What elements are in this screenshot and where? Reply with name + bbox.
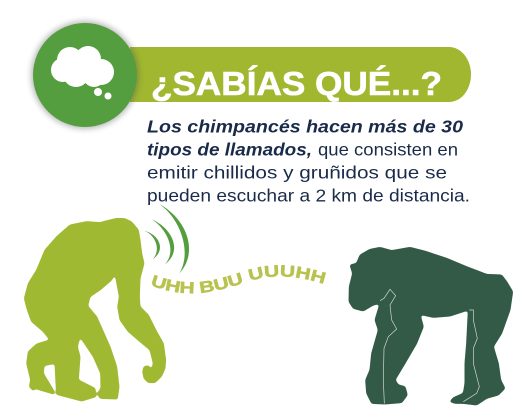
- icon: light green chimpanzee silhouette: [24, 218, 166, 401]
- text block: chimpanzee calls fact: emitir chillidos y gruñidos que se: [147, 162, 447, 182]
- text block: chimpanzee calls fact: tipos de llamados,: [147, 140, 312, 160]
- icon: sound waves: [144, 204, 189, 273]
- text block: chimpanzee calls fact: que consisten en: [318, 140, 458, 160]
- text block: chimpanzee calls fact: [147, 116, 470, 206]
- text block: chimpanzee calls fact: pueden escuchar a 2 km de distancia.: [147, 186, 470, 206]
- title banner: [130, 47, 471, 102]
- limb outlines: [380, 289, 479, 403]
- text block: chimpanzee calls fact: Los chimpancés hacen más de 30: [147, 116, 463, 136]
- title: ¿SABÍAS QUÉ...?: [151, 65, 442, 102]
- icon: cloud: [51, 46, 114, 100]
- icon: dark green chimpanzee silhouette: [349, 247, 513, 405]
- icon: thought bubble badge: [31, 21, 139, 129]
- curved sound text: UHH BUU UUUHH: [152, 264, 326, 294]
